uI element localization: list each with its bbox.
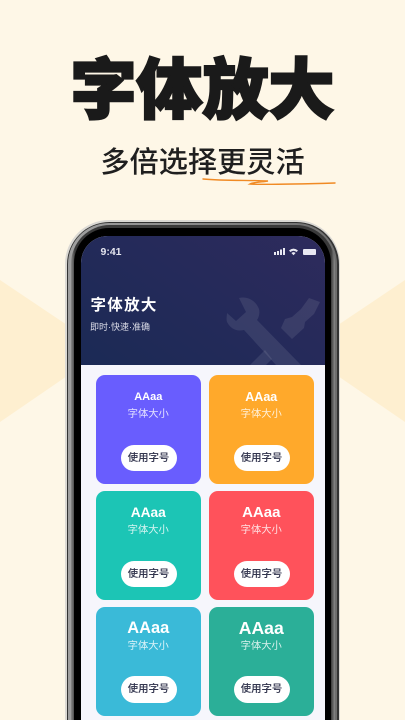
button [234, 444, 290, 471]
title: 字体放大 [70, 53, 334, 127]
phone mockup [65, 220, 340, 720]
phone outer edge [65, 220, 340, 720]
label: 字体大小 [128, 524, 169, 536]
label: 字体大小 [128, 640, 169, 652]
header tagline: 即时·快速·准确 [90, 322, 150, 332]
button [234, 676, 290, 702]
card: red [208, 491, 314, 600]
sample text: AAaa [127, 618, 169, 636]
button [120, 444, 176, 471]
button [120, 560, 176, 587]
card: green [208, 606, 314, 716]
button: 使用字号 [128, 568, 169, 580]
button [234, 560, 290, 587]
sample text: AAaa [245, 390, 277, 404]
label: 字体大小 [241, 640, 282, 652]
phone dark rim [66, 222, 338, 720]
button: 使用字号 [241, 568, 282, 580]
sample text: AAaa [242, 504, 280, 520]
phone black bezel [74, 228, 331, 720]
button: 使用字号 [241, 684, 282, 695]
label: 字体大小 [128, 408, 169, 420]
button: 使用字号 [128, 684, 169, 695]
button: 使用字号 [128, 452, 169, 464]
orange scribble underline [202, 178, 336, 185]
card: teal [96, 491, 201, 600]
sample text: AAaa [134, 391, 162, 403]
label: 字体大小 [241, 524, 282, 536]
icon: crossed wrench and screwdriver [226, 298, 320, 365]
status bar time: 9:41 [100, 246, 122, 258]
status bar icons [274, 248, 316, 256]
card: orange [208, 375, 314, 484]
card: purple [96, 375, 201, 484]
sample text: AAaa [131, 504, 166, 520]
button: 使用字号 [241, 452, 282, 464]
phone metal band [68, 223, 337, 720]
header title: 字体放大 [90, 296, 158, 314]
label: 字体大小 [241, 408, 282, 420]
header panel [80, 236, 325, 364]
phone inner band [70, 225, 334, 720]
subtitle: 多倍选择更灵活 [100, 146, 305, 178]
button [120, 676, 176, 702]
phone screen [80, 236, 325, 720]
card: sky blue [96, 606, 201, 716]
sample text: AAaa [239, 618, 284, 638]
